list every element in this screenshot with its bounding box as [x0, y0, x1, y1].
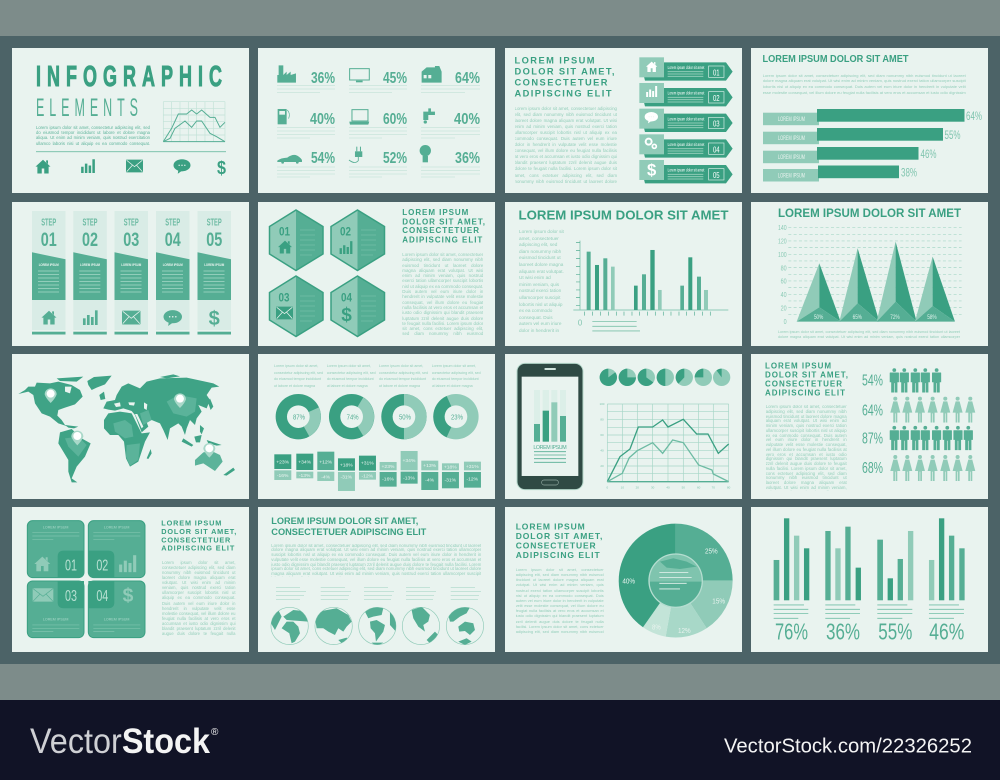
step 04: LOREM IPSUM [163, 262, 183, 267]
line chart: 0 [606, 485, 608, 489]
pie chart: 40% [622, 577, 635, 586]
square 03 [27, 581, 84, 638]
area chart [778, 225, 962, 326]
stat 54%: 54% [311, 150, 335, 167]
bar 64%: 64% [966, 109, 982, 123]
donut charts: 50% [399, 412, 411, 421]
step 01: STEP [41, 218, 56, 229]
step 03 [114, 211, 148, 334]
bar chart: 0 [578, 318, 583, 327]
heading: DOLOR SIT AMET, [161, 527, 236, 536]
step 05: STEP [207, 218, 222, 229]
ribbon 05: Lorem ipsum dolor sit amet [668, 168, 705, 173]
gain-loss boxes: +34% [298, 460, 312, 466]
ribbon 05: $ [647, 160, 657, 179]
ribbon list [639, 57, 733, 183]
area chart: 100 [778, 252, 787, 259]
heading: ADIPISCING ELIT [516, 550, 600, 560]
ribbon 02: Lorem ipsum dolor sit amet [668, 91, 705, 96]
heading: DOLOR SIT AMET, [402, 217, 485, 226]
line chart: 70 [712, 485, 715, 489]
globe [649, 554, 703, 608]
icon: bars [81, 159, 95, 173]
line chart: 20 [600, 464, 604, 468]
heading: LOREM IPSUM DOLOR SIT AMET [518, 208, 729, 222]
bar groups [774, 518, 965, 618]
panel: phone and line chart [505, 354, 742, 499]
square 01 [27, 521, 84, 578]
heading: LOREM IPSUM DOLOR SIT AMET [778, 208, 961, 220]
heading [271, 516, 426, 538]
heading: LOREM IPSUM DOLOR SIT AMET [762, 54, 909, 65]
panel: infographic elements title slide [12, 48, 249, 193]
stat 40%: 40% [310, 111, 335, 128]
line chart [599, 402, 731, 489]
gain-loss boxes: +13% [423, 463, 437, 469]
line chart: 100 [599, 402, 605, 406]
gain-loss boxes: -12% [466, 476, 479, 482]
step 03: LOREM IPSUM [121, 262, 142, 267]
heading: DOLOR SIT AMET, [765, 370, 848, 379]
ribbon 03 [639, 109, 733, 132]
line chart: 30 [651, 485, 655, 489]
panel: horizontal bars [751, 48, 988, 193]
bar 55%: 55% [944, 128, 961, 142]
area chart: 60 [781, 279, 787, 286]
footer image id: VectorStock.com/22326252 [724, 736, 972, 758]
area chart: 80 [781, 265, 787, 272]
gain-loss boxes: +18% [444, 465, 457, 471]
square 04: $ [123, 586, 134, 607]
percent 55%: 55% [878, 619, 912, 645]
step 01 [32, 211, 66, 334]
line chart: 60 [697, 485, 701, 489]
phone [517, 363, 583, 490]
map pin: Asia [174, 393, 186, 408]
stat 36%: 36% [311, 70, 335, 87]
hexagon 01: 01 [279, 224, 290, 238]
area chart: 40 [781, 292, 787, 299]
ribbon 01: Lorem ipsum dolor sit amet [668, 65, 705, 70]
area chart: 65% [853, 314, 862, 321]
heading: CONSECTETUER [161, 535, 231, 544]
stat 60%: 60% [383, 111, 407, 128]
map [18, 374, 235, 482]
map pin: Australia [203, 443, 215, 458]
percent labels: 87% [862, 430, 883, 448]
step 05: 05 [206, 230, 223, 251]
icon: chat [174, 159, 190, 174]
icon: dollar: $ [217, 158, 226, 178]
stat 45%: 45% [383, 70, 407, 87]
percent labels: 64% [862, 402, 883, 420]
ribbon 03: 03 [713, 119, 720, 129]
icons [277, 65, 442, 164]
ribbon 05: 05 [713, 170, 720, 180]
bar 46%: 46% [920, 147, 937, 161]
ribbon 04 [639, 134, 733, 158]
ribbon 04: Lorem ipsum dolor sit amet [668, 142, 705, 147]
gain-loss boxes: +31% [466, 464, 479, 470]
four numbered squares [27, 521, 145, 638]
percent 76%: 76% [775, 619, 808, 645]
heading: CONSECTETUER [516, 540, 596, 550]
map pin: South America [71, 431, 83, 445]
heading: LOREM IPSUM [516, 522, 585, 532]
step 04: STEP [165, 218, 180, 229]
step 02: STEP [83, 218, 98, 229]
square 02 [88, 521, 145, 578]
heading: CONSECTETUER [514, 77, 608, 87]
icon: mail [126, 160, 143, 172]
square 01: 01 [65, 558, 77, 575]
bar 64% [763, 109, 982, 125]
area chart: 72% [890, 314, 900, 321]
stat 36%: 36% [455, 150, 480, 167]
gain-loss boxes: +18% [340, 462, 353, 468]
square 01: LOREM IPSUM [43, 526, 68, 530]
step 02: LOREM IPSUM [80, 262, 100, 267]
stat 52%: 52% [383, 150, 407, 167]
line chart: 40 [600, 448, 604, 452]
globes [270, 607, 484, 647]
panel: steps [12, 202, 249, 346]
gain-loss boxes: -31% [444, 478, 457, 484]
gain-loss boxes: +23% [276, 460, 290, 466]
globe captions [276, 588, 481, 600]
panel: people stats [751, 354, 988, 499]
heading: ADIPISCING ELIT [514, 88, 612, 98]
percent labels: 54% [862, 372, 883, 390]
bar 64%: LOREM IPSUM [778, 116, 805, 123]
donut charts: 74% [347, 412, 359, 421]
panel: grouped bars with big percents [751, 507, 988, 652]
hexagon 04: 04 [341, 290, 352, 304]
heading: DOLOR SIT AMET, [516, 531, 602, 541]
subtitle: ELEMENTS [36, 94, 138, 122]
heading [402, 208, 485, 244]
hexagon 03 [270, 276, 323, 336]
donut charts: 23% [451, 412, 463, 421]
pie chart: 8% [652, 622, 661, 631]
bar 38%: 38% [901, 166, 917, 180]
heading: CONSECTETUER [765, 379, 842, 388]
gain-loss boxes: +12% [319, 460, 333, 466]
heading: LOREM IPSUM [765, 361, 831, 370]
heading: LOREM IPSUM [402, 208, 469, 217]
heading [514, 55, 614, 98]
panel: world map [12, 354, 249, 499]
panel: icon statistics [258, 48, 495, 193]
area chart: 140 [778, 225, 787, 232]
phone: LOREM IPSUM [533, 445, 567, 451]
hexagon 04: $ [341, 305, 352, 326]
percent 46%: 46% [929, 619, 964, 645]
stat 64%: 64% [455, 70, 480, 87]
area chart: 120 [778, 239, 787, 246]
step 02: 02 [82, 230, 98, 251]
heading: DOLOR SIT AMET, [514, 66, 614, 76]
pie chart [619, 524, 733, 638]
panel: segmented pie with globe [505, 507, 742, 652]
area chart: 0 [784, 319, 787, 326]
stat 40%: 40% [454, 111, 480, 128]
heading: ADIPISCING ELIT [765, 388, 845, 397]
title: INFOGRAPHIC [36, 61, 222, 93]
gain-loss boxes: -4% [425, 478, 435, 484]
heading: CONSECTETUER ADIPISCING ELIT [271, 527, 426, 538]
gain-loss boxes [274, 451, 481, 491]
heading [161, 519, 236, 553]
heading: LOREM IPSUM [161, 519, 221, 528]
panel: globes [258, 507, 495, 652]
footer logo: VectorStock [30, 722, 210, 761]
people pictograms [890, 368, 975, 481]
line chart: 50 [682, 485, 685, 489]
caption lines [277, 86, 480, 177]
panel: rounded squares [12, 507, 249, 652]
registered mark: ® [211, 727, 219, 738]
gain-loss boxes: +31% [361, 461, 374, 467]
heading: LOREM IPSUM [514, 55, 595, 65]
gain-loss boxes: +34% [403, 458, 416, 464]
step 01: LOREM IPSUM [39, 262, 59, 267]
gain-loss boxes: -13% [403, 475, 415, 481]
hexagon 01 [270, 210, 323, 270]
step 01: 01 [41, 230, 57, 251]
area chart: 20 [781, 305, 787, 312]
map pin: North America [45, 388, 57, 403]
gain-loss boxes: -12% [361, 473, 374, 479]
line chart: 40 [666, 485, 670, 489]
ribbon 05 [639, 160, 733, 183]
square 04: 04 [96, 588, 109, 605]
line chart: 10 [621, 485, 624, 489]
step 05 [198, 211, 231, 334]
heading [765, 361, 848, 397]
line chart: 80 [727, 485, 731, 489]
line chart: 80 [600, 417, 604, 421]
bar chart [573, 241, 728, 331]
panel: triangle chart [751, 202, 988, 346]
hexagon 02 [331, 210, 384, 270]
area chart: 50% [814, 314, 824, 321]
line chart [163, 102, 225, 142]
area chart: 58% [927, 314, 937, 321]
panel: donuts and gain-loss boxes [258, 354, 495, 499]
square 02: LOREM IPSUM [104, 526, 129, 530]
small pies [600, 369, 730, 386]
ribbon 02 [639, 83, 733, 106]
square 03: LOREM IPSUM [43, 617, 68, 621]
panel: hexagons [258, 202, 495, 346]
step 05: $ [209, 308, 220, 330]
heading [516, 522, 602, 560]
gain-loss boxes: -4% [321, 474, 331, 480]
square 04: LOREM IPSUM [104, 617, 129, 621]
gain-loss boxes: +23% [382, 464, 395, 470]
step 04: 04 [165, 230, 181, 251]
ribbon 01 [639, 57, 733, 81]
heading: ADIPISCING ELIT [161, 544, 235, 553]
hexagon 02: 02 [340, 224, 351, 238]
hexagon 03: 03 [278, 290, 290, 304]
ribbon 04: 04 [713, 144, 720, 154]
line chart: 20 [636, 485, 639, 489]
line chart: 60 [600, 433, 604, 437]
pie chart: 25% [705, 547, 718, 556]
bar 46% [763, 147, 937, 163]
percent 36%: 36% [826, 619, 860, 645]
heading: LOREM IPSUM DOLOR SIT AMET, [271, 516, 418, 527]
step 05: LOREM IPSUM [204, 262, 225, 267]
donut charts: 87% [293, 412, 305, 421]
gain-loss boxes: -16% [277, 473, 289, 479]
step 02 [73, 211, 107, 334]
percent labels [862, 372, 883, 477]
ribbon 01: 01 [713, 67, 720, 77]
bar 55% [763, 128, 961, 144]
icon: home [36, 160, 50, 174]
square 04 [88, 581, 145, 638]
square 03: 03 [65, 588, 77, 605]
bar 46%: LOREM IPSUM [778, 154, 805, 161]
heading: CONSECTETUER [402, 226, 479, 235]
square 02: 02 [96, 558, 108, 575]
step 03: STEP [124, 218, 139, 229]
panel: numbered ribbons [505, 48, 742, 193]
bar 38% [763, 166, 917, 182]
ribbon 03: Lorem ipsum dolor sit amet [668, 116, 705, 121]
donut charts [276, 394, 479, 439]
ribbon 02: 02 [713, 93, 720, 103]
pie chart: 12% [678, 626, 691, 635]
percent labels: 68% [862, 460, 883, 477]
panel: column chart [505, 202, 742, 346]
pie chart: 15% [712, 596, 725, 605]
hexagon 04 [331, 276, 384, 336]
bar 55%: LOREM IPSUM [778, 135, 805, 142]
bar 38%: LOREM IPSUM [778, 172, 805, 180]
step 04 [156, 211, 190, 334]
gain-loss boxes: -31% [340, 474, 353, 480]
gain-loss boxes: -13% [299, 473, 311, 479]
heading: ADIPISCING ELIT [402, 235, 482, 244]
step 03: 03 [123, 230, 139, 251]
gain-loss boxes: -16% [382, 477, 394, 483]
